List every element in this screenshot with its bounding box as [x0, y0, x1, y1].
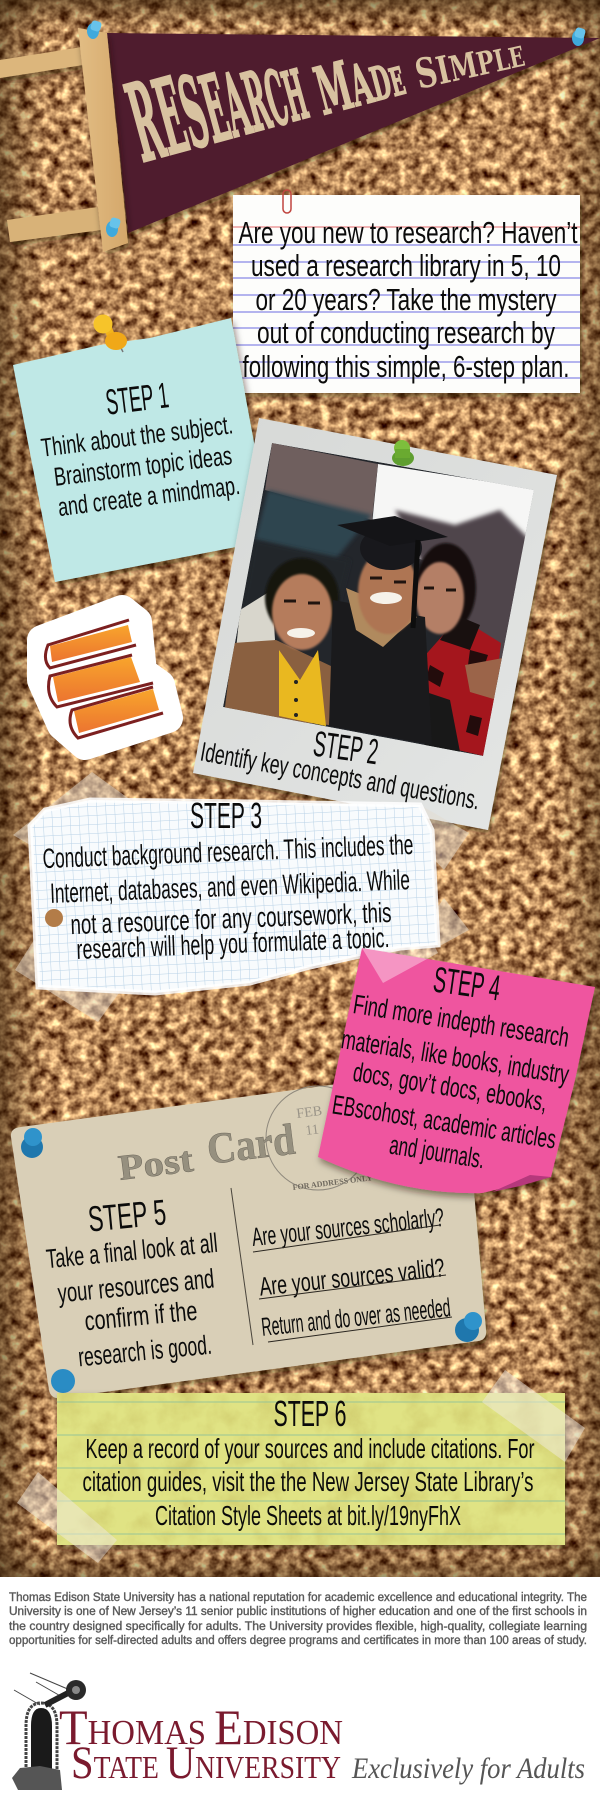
step 4 text — [330, 989, 571, 1174]
step 1 heading: STEP 1 — [103, 374, 171, 423]
note curl — [492, 1175, 551, 1192]
panel: step 1 sticky note — [13, 314, 272, 582]
step 5 text: confirm if the — [83, 1296, 199, 1336]
postmark stamp — [266, 1086, 373, 1192]
ruled lines — [233, 227, 580, 378]
post card lettering: Post — [116, 1139, 195, 1188]
logo wordmark — [59, 1699, 343, 1789]
pennant strip — [78, 28, 128, 252]
step 4 heading: STEP 4 — [431, 959, 503, 1008]
step 5 text: Take a final look at all — [45, 1228, 219, 1274]
panel: step 2 polaroid — [193, 418, 557, 830]
step 3 text — [42, 829, 414, 965]
intro text — [238, 215, 578, 384]
paperclip — [283, 190, 291, 213]
icon: blue pin bottom — [51, 1369, 75, 1393]
title word research: RESEARCH — [115, 18, 318, 187]
step 2 heading: STEP 2 — [311, 723, 381, 772]
step 1 text — [39, 409, 242, 522]
step 6 text — [82, 1433, 534, 1531]
bottom book — [70, 687, 163, 738]
step 3 text: research will help you formulate a topic. — [76, 922, 390, 965]
footer panel — [0, 1577, 600, 1800]
top book — [45, 620, 136, 668]
pennant top loop — [0, 47, 83, 78]
icon: book stack sticker — [42, 610, 168, 745]
icon: pennant pin bottom — [106, 217, 121, 237]
paper crumple texture — [57, 1393, 565, 1545]
logo wordmark: STATE UNIVERSITY — [71, 1737, 341, 1789]
icon: pennant pin tip — [572, 27, 586, 46]
tape pieces — [13, 772, 469, 1022]
intro note on ruled paper — [233, 190, 580, 393]
step 5 text — [45, 1228, 219, 1372]
pennant bottom loop — [7, 207, 101, 242]
logo wordmark: THOMAS EDISON — [59, 1699, 343, 1755]
paper rules — [57, 1402, 565, 1534]
step 1 text: Think about the subject. — [39, 409, 234, 463]
title word simple: SIMPLE — [411, 28, 529, 99]
step 5 text: research is good. — [77, 1330, 213, 1372]
panel: step 6 yellow paper — [17, 1370, 585, 1563]
graph paper sheet — [30, 800, 438, 993]
icon: blue pin right — [455, 1312, 482, 1342]
panel: step 4 pink sticky note — [318, 945, 595, 1193]
step 4 text: and journals. — [387, 1130, 487, 1174]
right woman — [416, 542, 502, 756]
about text: University is one of New Jersey’s 11 senior public institutions of higher education and one of the first schools in — [9, 1604, 587, 1618]
title word made: MADE — [308, 35, 411, 131]
photo: graduate with two women — [223, 443, 540, 756]
postmark stamp: 11 — [305, 1122, 320, 1139]
graduate — [329, 516, 448, 745]
postcard divider — [231, 1188, 253, 1345]
step 1 text: Brainstorm topic ideas — [52, 440, 234, 492]
postcard questions: Are your sources scholarly? — [250, 1202, 445, 1252]
middle book — [49, 655, 153, 707]
panel: step 5 postcard — [11, 1068, 486, 1398]
step 1 text: and create a mindmap. — [56, 470, 242, 522]
tape pieces — [17, 1370, 585, 1563]
logo engraving: edison lamp and arch — [12, 1673, 86, 1790]
postmark stamp: FOR ADDRESS ONLY — [292, 1173, 373, 1192]
icon: green push pin — [392, 440, 414, 466]
icon: pennant pin top — [87, 20, 102, 39]
about text: the country designed specifically for adults. The University provides flexible, high-quality, collegiate learning — [9, 1619, 587, 1633]
pennant: research made simple — [0, 18, 600, 252]
about text — [9, 1590, 587, 1647]
tape on note — [362, 945, 438, 983]
step 5 text: your resources and — [56, 1264, 215, 1308]
hole punch — [45, 909, 63, 927]
step 6 heading: STEP 6 — [274, 1393, 346, 1434]
post card lettering: Card — [204, 1115, 298, 1174]
step 3 heading: STEP 3 — [190, 795, 262, 836]
postcard questions — [250, 1202, 452, 1342]
postmark stamp: FEB — [296, 1104, 323, 1122]
pennant felt — [107, 33, 600, 233]
post card lettering — [116, 1115, 298, 1188]
left woman — [224, 558, 339, 726]
icon: yellow push pin — [94, 314, 127, 352]
step 5 heading: STEP 5 — [86, 1191, 168, 1240]
panel: step 3 graph paper — [13, 772, 469, 1022]
step 3 text: not a resource for any coursework, this — [70, 897, 392, 940]
icon: blue pin top left — [21, 1128, 43, 1158]
postcard questions: Are your sources valid? — [258, 1252, 446, 1302]
